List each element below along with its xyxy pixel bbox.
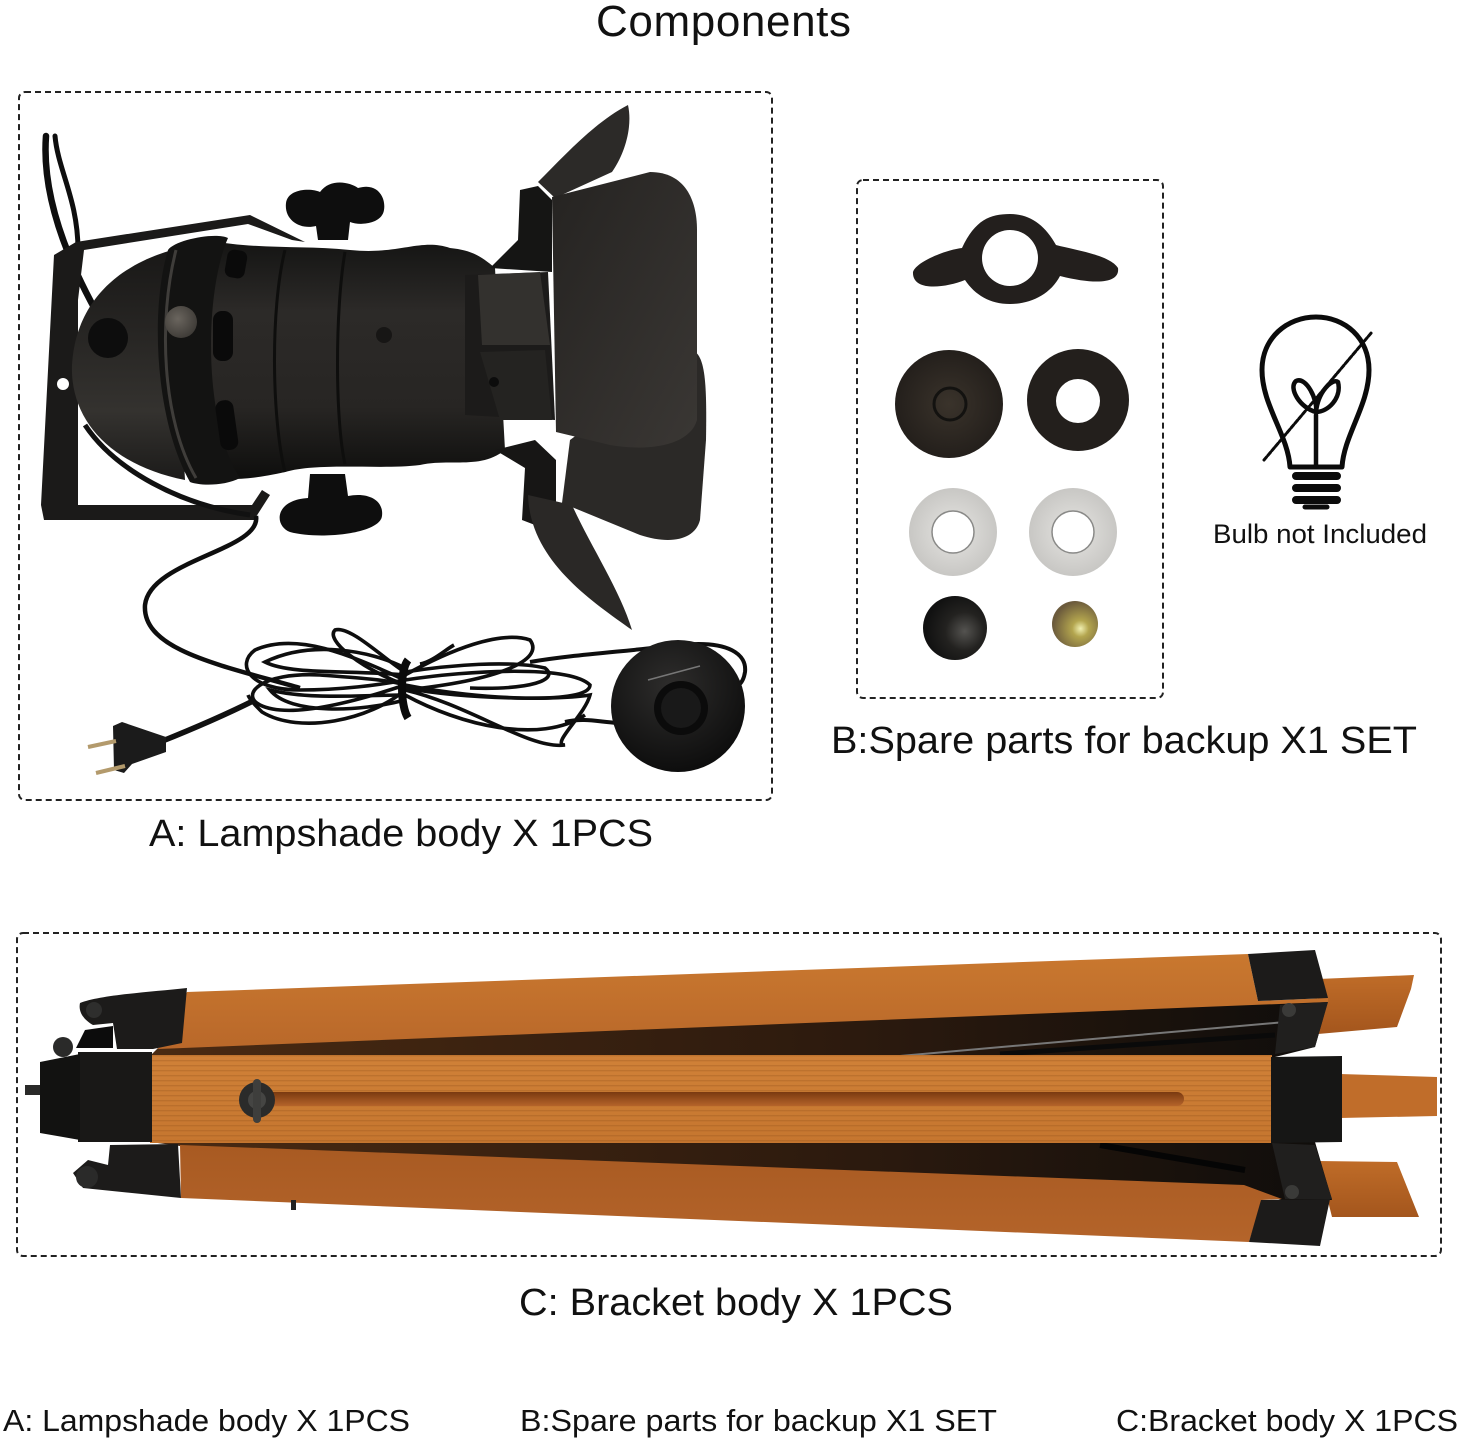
right hinge hardware [1275,1002,1328,1054]
caption B: B:Spare parts for backup X1 SET [831,720,1417,762]
lamp barrel [205,240,505,479]
upper gap shadow [150,1001,1328,1058]
hinge arms [490,186,552,272]
power cord loop at rear [46,136,108,332]
icon: crossed out bulb [1262,317,1372,507]
rear grommet [88,318,128,358]
lower leg [180,1145,1282,1242]
upper leg tip [1318,975,1414,1034]
metal struts lower [1100,1145,1245,1170]
wing screw [239,1079,275,1123]
left hub and brackets [80,988,187,1049]
bottom barn door [528,495,632,630]
caption C: C: Bracket body X 1PCS [519,1282,953,1324]
metal washer right [1029,488,1117,576]
plug cable [160,700,255,742]
center screw [376,327,392,343]
yoke bracket [41,215,305,520]
right brackets [1248,950,1328,1001]
photo: spot lamp [41,105,745,773]
footer item A: A: Lampshade body X 1PCS [3,1403,410,1438]
brass nut [1052,601,1098,647]
black ball nut [923,596,987,660]
cord tie [402,660,408,718]
bulb note: Bulb not Included [1213,519,1427,549]
panel: bracket body [17,933,1441,1256]
barrel rings [274,250,345,472]
top thumb knob [286,182,384,240]
bottom thumb knob [280,474,382,535]
rear cord behind dome [85,425,250,515]
plug prongs [88,741,125,773]
panel border A [19,92,772,800]
ring dark washer [1027,349,1129,451]
panel: lampshade body [19,92,772,800]
lamp rear dome [72,250,185,480]
coiled cord bundle [246,630,590,745]
metal struts upper [900,1022,1285,1056]
flat dark washer [895,350,1003,458]
long cord to bundle [145,516,300,688]
middle leg tip [1340,1074,1437,1118]
band stud [165,306,197,338]
mounting hole [57,378,69,390]
center leg slot [258,1092,1184,1106]
vent slots [213,248,248,451]
footer item B: B:Spare parts for backup X1 SET [520,1403,997,1438]
neck clamp [465,272,555,420]
lower leg tip [1318,1161,1419,1217]
panel border B [857,180,1163,698]
panel border C [17,933,1441,1256]
switch cord [530,644,745,723]
panel: spare parts [857,180,1163,698]
foot switch [611,640,745,772]
metal washer left [909,488,997,576]
upper leg [158,954,1328,1049]
footer item C: C:Bracket body X 1PCS [1116,1403,1458,1438]
caption A: A: Lampshade body X 1PCS [149,813,653,855]
footer list [3,1403,1458,1438]
wing nut [913,214,1118,304]
photo: folded tripod [25,950,1437,1246]
lower gap shadow [150,1142,1332,1200]
top barn door [538,105,629,198]
front barn door [552,172,697,448]
strap band [158,236,240,485]
center leg [150,1055,1272,1143]
plug [113,722,166,773]
right lower barn door [562,350,706,540]
